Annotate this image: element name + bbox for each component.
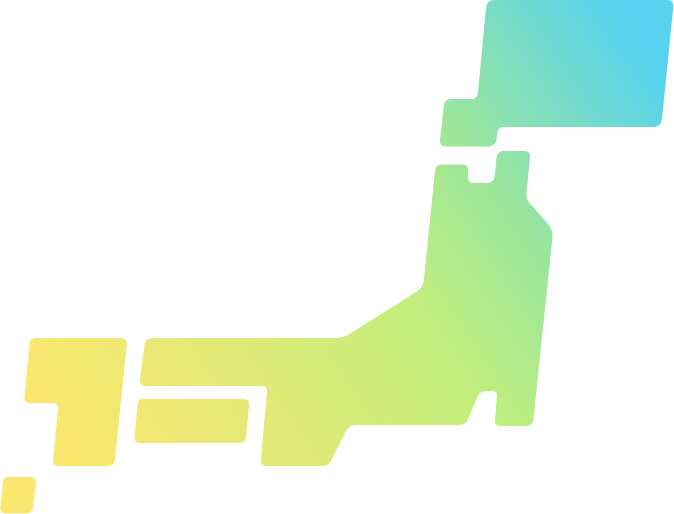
region: Okinawa (0, 477, 36, 514)
region: Honshu (140, 151, 553, 466)
region: Kyushu (24, 338, 127, 466)
region: Shikoku (134, 399, 249, 443)
region: Hokkaido (440, 0, 673, 146)
